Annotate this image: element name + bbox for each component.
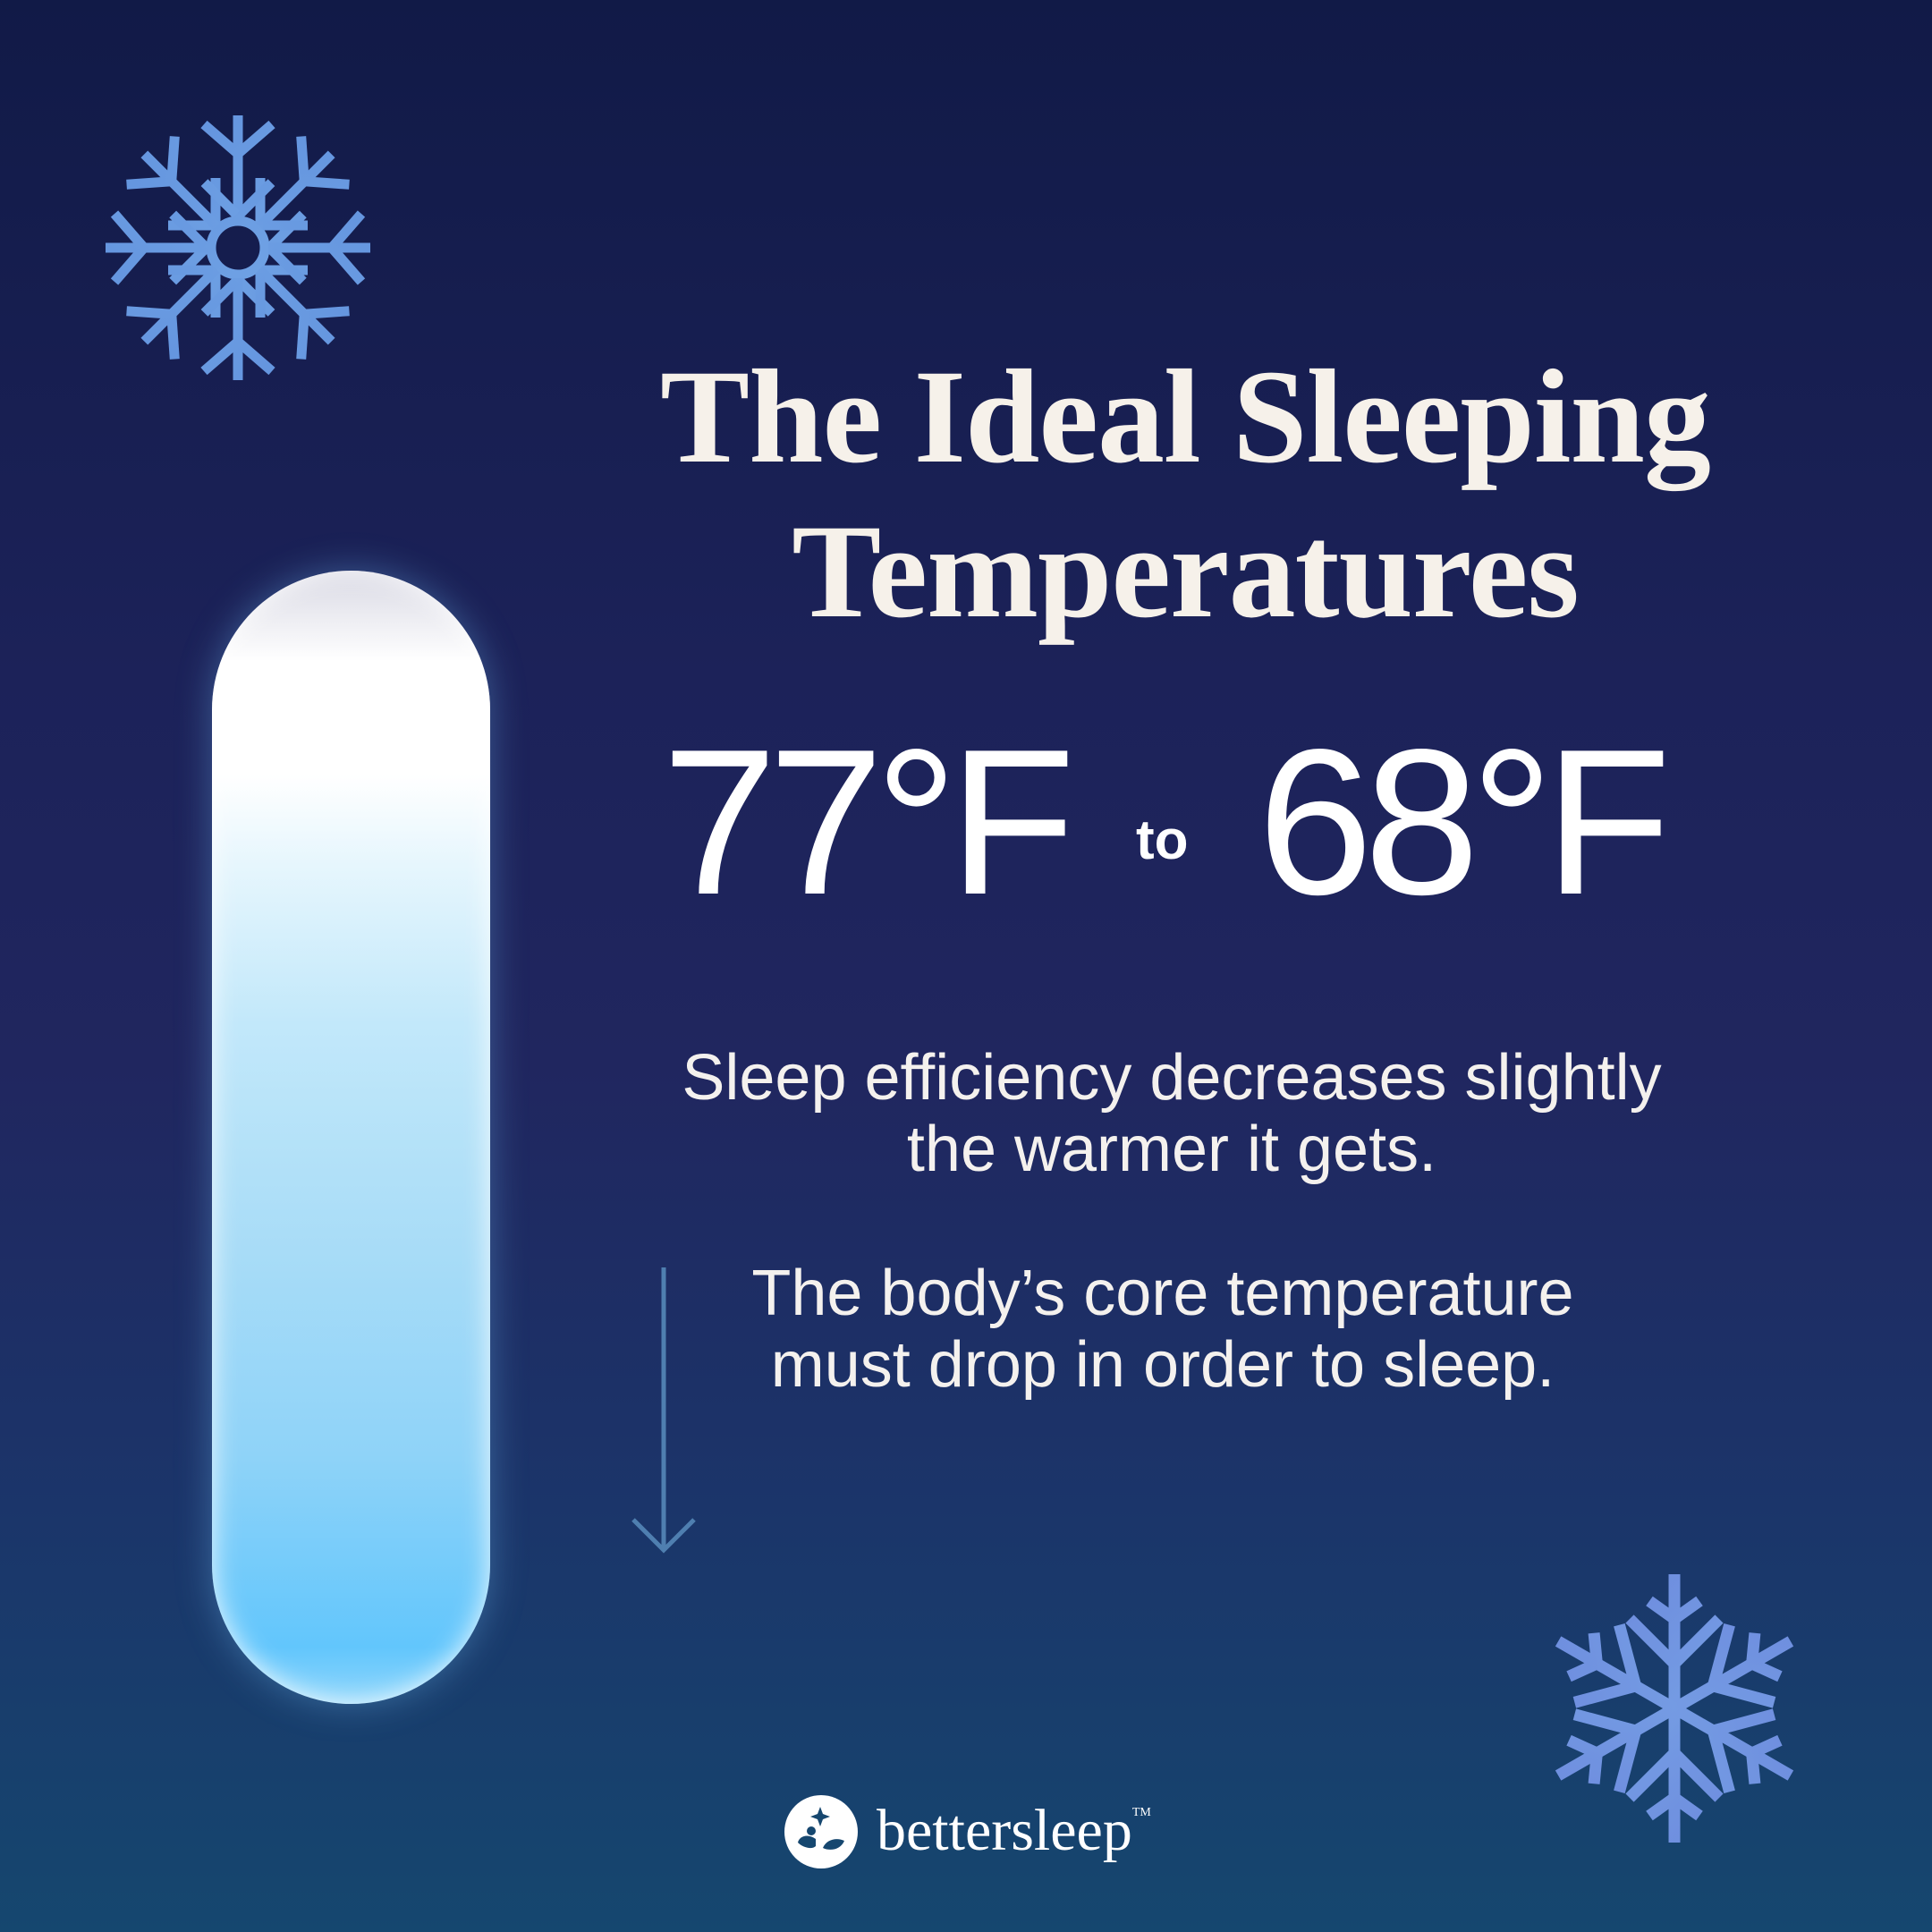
icon: logo circle [784, 1795, 858, 1868]
text: brand: bettersleepTM [877, 1798, 1151, 1863]
text: core temperature: must drop in order to sleep. [771, 1329, 1555, 1401]
logo [784, 1795, 1151, 1868]
title: The Ideal Sleeping [660, 343, 1710, 491]
temperature range: to [1136, 809, 1189, 871]
temperature range: 68°F [1258, 707, 1663, 938]
text: sleep efficiency [682, 1042, 1662, 1185]
temperature range [662, 707, 1664, 938]
text: core temperature [751, 1258, 1574, 1401]
icon: snowflake top-left [106, 115, 370, 380]
text: sleep efficiency: Sleep efficiency decreases slightly [682, 1042, 1662, 1114]
arrow: down [631, 1267, 696, 1553]
text: sleep efficiency: the warmer it gets. [907, 1114, 1436, 1185]
temperature range: 77°F [662, 707, 1067, 938]
icon: snowflake bottom-right [1555, 1574, 1794, 1843]
title: Temperatures [792, 497, 1579, 646]
title [660, 343, 1710, 646]
thermometer [212, 571, 490, 1704]
text: core temperature: The body’s core temperature [751, 1258, 1574, 1329]
